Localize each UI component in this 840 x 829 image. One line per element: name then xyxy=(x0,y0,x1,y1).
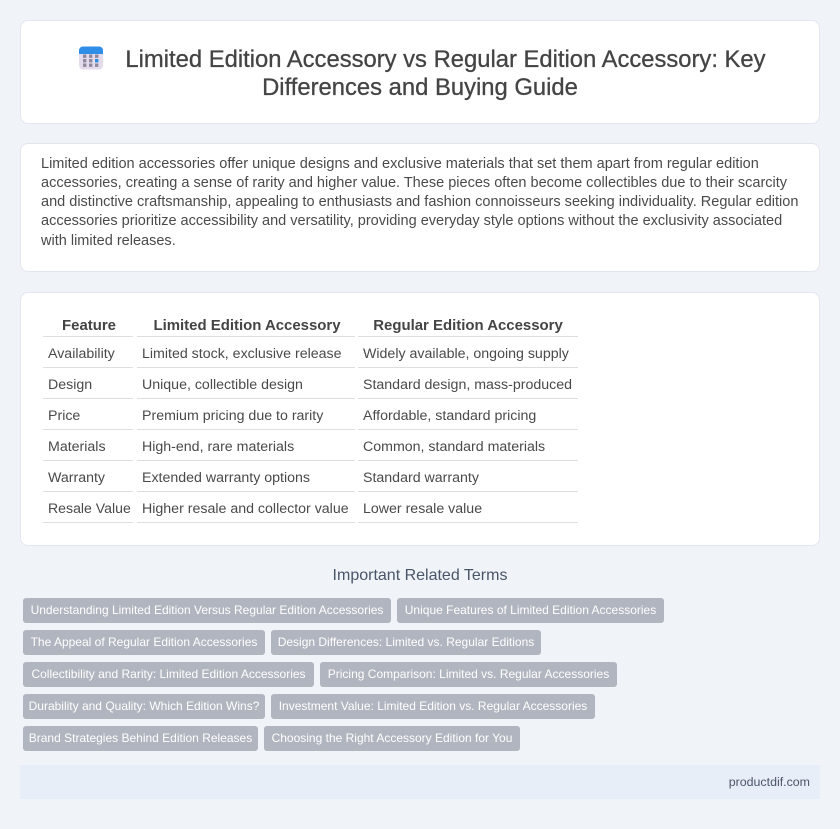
table headers xyxy=(62,317,563,334)
table headers: Limited Edition Accessory xyxy=(153,317,341,334)
panel: intro xyxy=(20,143,820,272)
table rows: Limited stock, exclusive release xyxy=(142,346,342,362)
table rows: Price xyxy=(48,408,80,424)
title xyxy=(125,46,766,101)
related terms tags: Understanding Limited Edition Versus Regular Edition Accessories xyxy=(31,603,383,617)
related terms tags: Collectibility and Rarity: Limited Edition Accessories xyxy=(31,667,306,681)
table rows: Lower resale value xyxy=(363,501,482,517)
table rows: Standard design, mass-produced xyxy=(363,377,572,393)
related terms heading: Important Related Terms xyxy=(333,567,507,584)
table rows: Resale Value xyxy=(48,500,131,516)
table rows: Affordable, standard pricing xyxy=(363,408,536,424)
panel: comparison table xyxy=(20,292,820,546)
table rows: Standard warranty xyxy=(363,470,479,486)
title: Differences and Buying Guide xyxy=(262,74,578,101)
table rows: Unique, collectible design xyxy=(142,377,303,393)
table rows: Common, standard materials xyxy=(363,439,545,455)
table rows: Premium pricing due to rarity xyxy=(142,408,323,424)
related terms tags: Choosing the Right Accessory Edition for You xyxy=(272,731,512,745)
intro text: accessories prioritize accessibility and versatility, providing everyday style options without the exclusivity associated xyxy=(41,213,782,229)
table rows xyxy=(43,336,578,523)
related terms tags: Brand Strategies Behind Edition Releases xyxy=(29,731,252,745)
table headers: Feature xyxy=(62,317,116,334)
footer source text: productdif.com xyxy=(729,775,810,789)
icon: calendar xyxy=(79,46,103,70)
intro text: Limited edition accessories offer unique designs and exclusive materials that set them apart from regular edition xyxy=(41,156,759,172)
related terms tags: The Appeal of Regular Edition Accessories xyxy=(31,635,257,649)
table rows: Availability xyxy=(48,346,115,362)
panel: header xyxy=(20,20,820,124)
table rows: Higher resale and collector value xyxy=(142,501,349,517)
table rows: Design xyxy=(48,377,92,393)
intro text: with limited releases. xyxy=(41,233,176,249)
footer xyxy=(20,765,820,799)
title: Limited Edition Accessory vs Regular Edition Accessory: Key xyxy=(125,46,766,73)
table rows: Warranty xyxy=(48,470,105,486)
related terms tags: Design Differences: Limited vs. Regular Editions xyxy=(278,635,534,649)
table headers: Regular Edition Accessory xyxy=(373,317,563,334)
table rows: Extended warranty options xyxy=(142,470,310,486)
related terms tags: Durability and Quality: Which Edition Wins? xyxy=(29,699,259,713)
table rows: High-end, rare materials xyxy=(142,439,294,455)
intro text: and distinctive craftsmanship, appealing to enthusiasts and fashion connoisseurs seeking individuality. Regular edition xyxy=(41,194,798,210)
table rows: Materials xyxy=(48,439,106,455)
related terms tags: Pricing Comparison: Limited vs. Regular Accessories xyxy=(328,667,609,681)
intro text: accessories, creating a sense of rarity and higher value. These pieces often become collectibles due to their scarcity xyxy=(41,175,787,191)
related terms tags: Investment Value: Limited Edition vs. Regular Accessories xyxy=(279,699,587,713)
related terms tags xyxy=(23,598,664,751)
related terms tags: Unique Features of Limited Edition Accessories xyxy=(405,603,656,617)
intro text xyxy=(41,156,798,249)
table rows: Widely available, ongoing supply xyxy=(363,346,569,362)
